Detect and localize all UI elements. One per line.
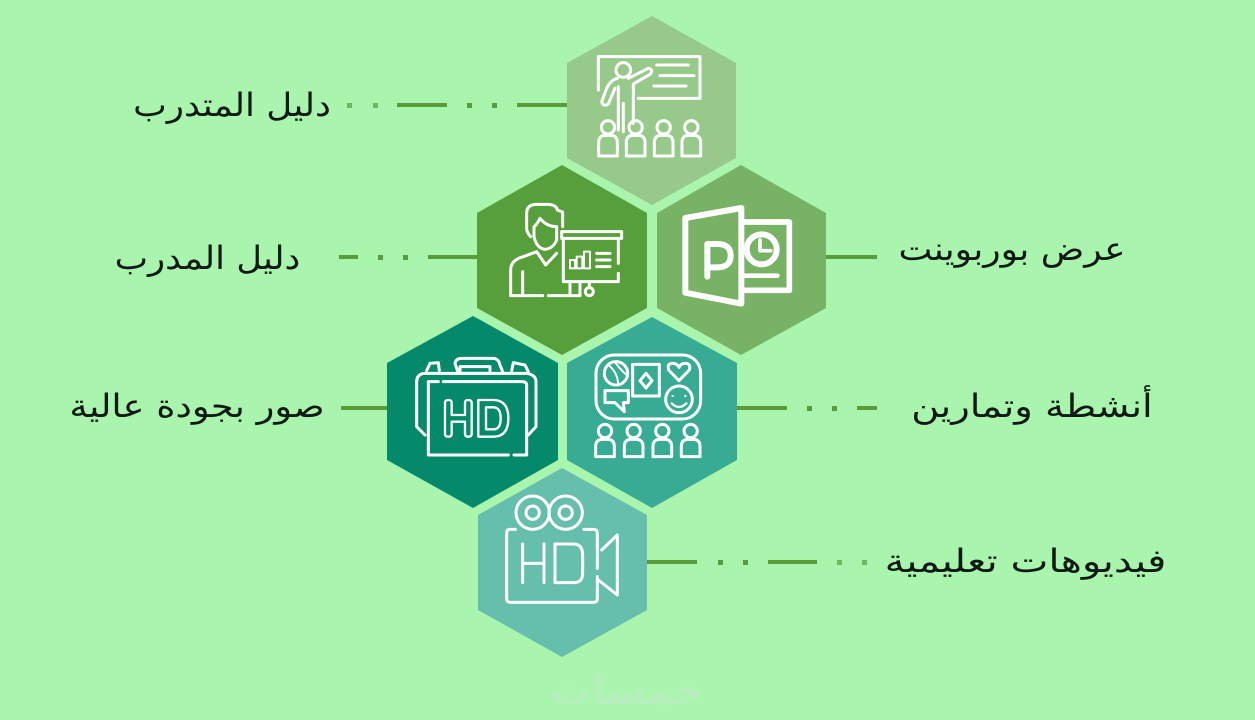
label: educational videos: فيديوهات تعليمية — [885, 542, 1166, 580]
icon: activity board with audience — [596, 355, 701, 457]
watermark: خمسات — [551, 668, 703, 714]
panel: trainee guide hexagon — [567, 16, 736, 205]
icon: presenter at board with audience — [598, 57, 701, 156]
label: trainer guide: دليل المدرب — [115, 240, 300, 277]
icon: HD camera bag — [417, 358, 536, 455]
icon: trainer beside chart board — [511, 204, 622, 296]
panel: high quality images hexagon — [387, 316, 558, 508]
label: activities and exercises: أنشطة وتمارين — [911, 385, 1153, 425]
connector: trainer guide — [339, 255, 477, 260]
connector: activities — [737, 406, 877, 411]
panel: trainer guide hexagon — [477, 165, 647, 355]
icon: PowerPoint logo — [685, 208, 789, 304]
connector: images — [341, 406, 387, 410]
label: PowerPoint presentation: عرض بوربوينت — [898, 231, 1126, 268]
connector: trainee guide — [347, 103, 567, 108]
panel: educational videos hexagon — [478, 468, 647, 657]
icon: HD video camera — [507, 496, 617, 602]
label: high quality images: صور بجودة عالية — [69, 388, 325, 425]
connector: PowerPoint — [826, 255, 877, 259]
panel: PowerPoint presentation hexagon — [657, 165, 826, 355]
label: trainee guide: دليل المتدرب — [133, 87, 331, 124]
panel: activities and exercises hexagon — [567, 317, 737, 508]
connector: videos — [647, 560, 867, 565]
